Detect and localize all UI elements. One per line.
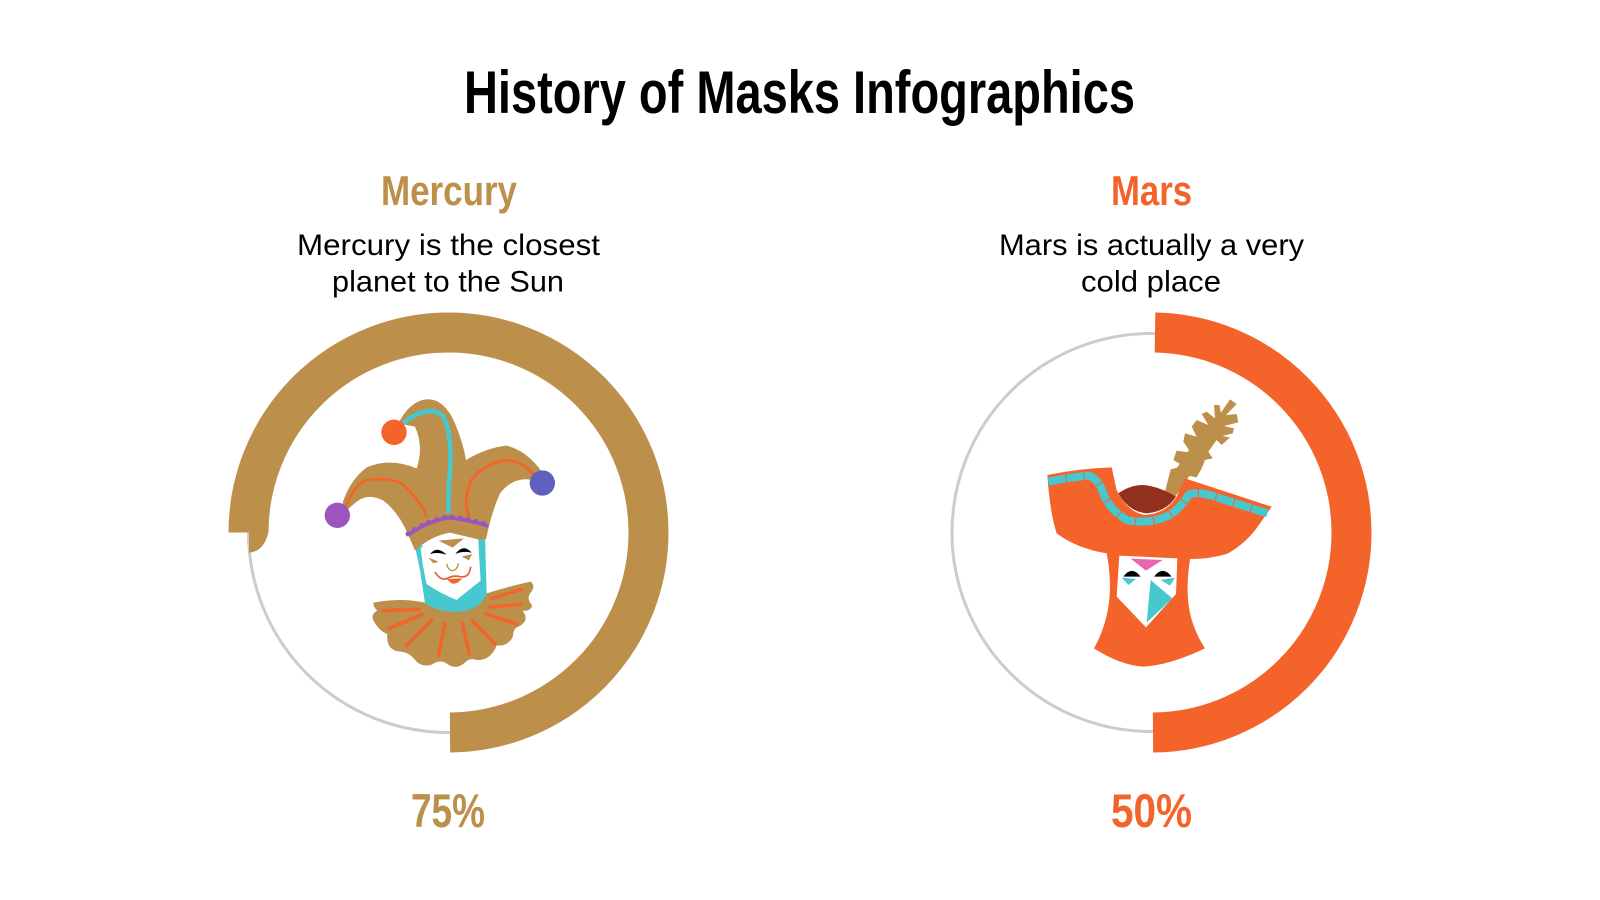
- heading: Mercury: Mercury: [381, 167, 518, 214]
- heading: Mars: Mars: [1111, 167, 1192, 214]
- text block: Mars description: cold place: [1081, 266, 1221, 298]
- face details: [1131, 559, 1163, 571]
- hat lines: [345, 411, 533, 535]
- collar: [373, 582, 533, 667]
- chart: Mercury 75% ring: [248, 332, 648, 732]
- neck: [415, 537, 487, 612]
- stat: Mars 50%: 50%: [1111, 784, 1192, 837]
- face details: [438, 538, 464, 548]
- chart: Mars 50% ring: [952, 332, 1352, 732]
- title: History of Masks Infographics: [464, 59, 1135, 126]
- stat: Mercury 75%: 75%: [411, 784, 485, 837]
- text block: Mercury description: planet to the Sun: [332, 266, 564, 298]
- panel: Mercury: [248, 167, 648, 732]
- icon: jester mask: [325, 399, 555, 667]
- collar stripes: [383, 589, 522, 655]
- feather: [1165, 399, 1238, 497]
- crown: [1118, 485, 1176, 513]
- panel: Mars: [952, 167, 1352, 732]
- face: [421, 533, 481, 600]
- white face: [1117, 556, 1177, 627]
- icon: tricorne hat mask: [1047, 399, 1272, 667]
- text block: Mercury description: [297, 229, 601, 298]
- hat: [343, 399, 542, 551]
- hat and cloak: [1047, 467, 1272, 667]
- braid: [1048, 476, 1267, 522]
- text block: Mercury description: Mercury is the closest: [297, 229, 601, 262]
- pompoms: [381, 420, 407, 445]
- text block: Mars description: Mars is actually a very: [999, 229, 1304, 262]
- text block: Mars description: [999, 229, 1304, 298]
